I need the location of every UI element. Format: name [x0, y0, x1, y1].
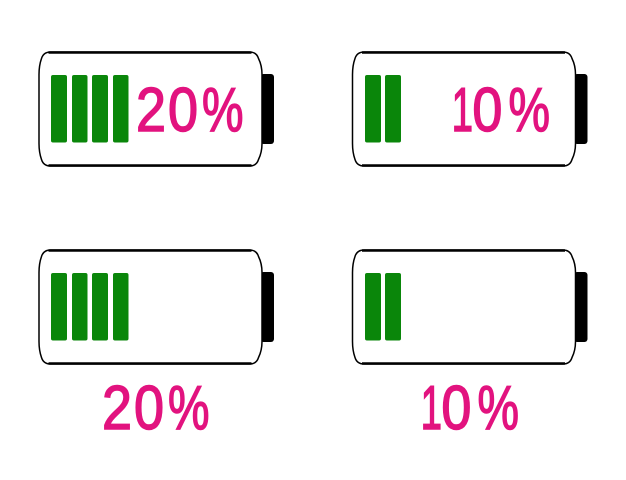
label: 20% below battery: 2 [102, 374, 132, 443]
charge bars: four green [51, 273, 128, 340]
battery: top left, 20% inside [39, 52, 274, 166]
charge bars: two green [365, 75, 401, 142]
label: 20% below battery: 0 [134, 374, 164, 443]
label: 10%: 1 [452, 76, 473, 145]
label: 20%: 0 [168, 76, 198, 145]
charge bars: two green [365, 273, 401, 340]
label: 10% below battery: 0 [441, 374, 471, 443]
label: 10% below battery: 1 [421, 374, 442, 443]
label: 10%: 0 [472, 76, 502, 145]
label: 20%: 2 [136, 76, 166, 145]
battery outline and terminal [352, 250, 588, 364]
battery outline and terminal [352, 52, 588, 166]
charge bars: four green [51, 75, 128, 142]
battery outline and terminal [39, 250, 274, 364]
label: 20% below battery: % [168, 374, 210, 443]
label: 10% below battery: % [478, 374, 519, 443]
battery: top right, 10% inside [352, 52, 588, 166]
label: 10%: % [508, 76, 550, 145]
battery: bottom right [352, 250, 588, 364]
battery: bottom left [39, 250, 274, 364]
label: 20%: % [202, 76, 244, 145]
battery outline and terminal [39, 52, 274, 166]
